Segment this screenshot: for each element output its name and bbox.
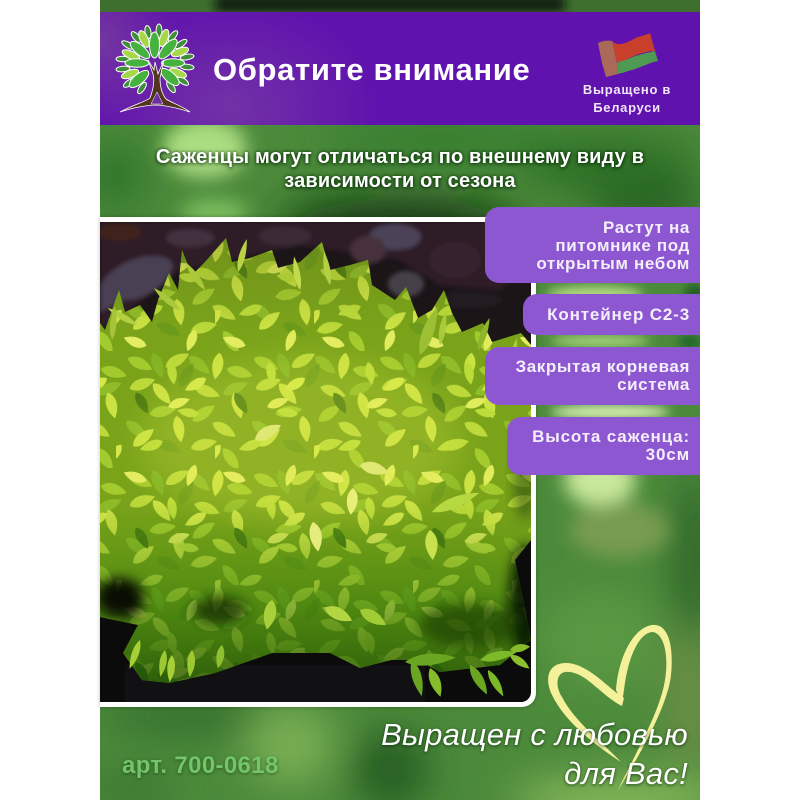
icon: tree logo [116, 24, 194, 112]
feature tag: root system: Закрытая корневая [515, 357, 690, 376]
prominent lower leaves [126, 419, 532, 698]
feature tag: seedling height [507, 417, 700, 475]
feature tag: growing conditions [485, 207, 700, 283]
flag caption: Беларуси [593, 100, 661, 115]
slogan: для Вас! [564, 756, 688, 791]
header banner [100, 12, 700, 125]
feature tag: growing conditions: Растут на [603, 218, 690, 237]
photo: golden shrub [100, 217, 536, 707]
shrub body [100, 238, 531, 683]
slogan: Выращен с любовью [381, 717, 688, 752]
dark background foliage [98, 222, 531, 703]
notice text: зависимости от сезона [284, 170, 516, 192]
feature tag: container [523, 294, 700, 335]
feature tag: container: Контейнер С2-3 [547, 305, 690, 324]
icon: hand-drawn heart [548, 624, 672, 790]
heading: Обратите внимание [213, 52, 530, 87]
feature tag: growing conditions: питомнике под [555, 236, 690, 255]
background: blurred green foliage [100, 0, 700, 800]
leaves along the crown edge [106, 238, 528, 374]
icon: Belarus flag [598, 33, 658, 77]
feature tag: root system: система [617, 375, 690, 394]
notice text [154, 146, 646, 192]
flag caption [583, 82, 671, 115]
slogan [381, 717, 689, 791]
feature tag: root system [485, 347, 700, 405]
feature tag: seedling height: 30см [646, 445, 690, 464]
notice text: Саженцы могут отличаться по внешнему виду в [156, 146, 644, 168]
feature tag: growing conditions: открытым небом [536, 254, 690, 273]
feature tag: seedling height: Высота саженца: [532, 427, 690, 446]
flag caption: Выращено в [583, 82, 671, 97]
article number: арт. 700-0618 [122, 752, 279, 779]
